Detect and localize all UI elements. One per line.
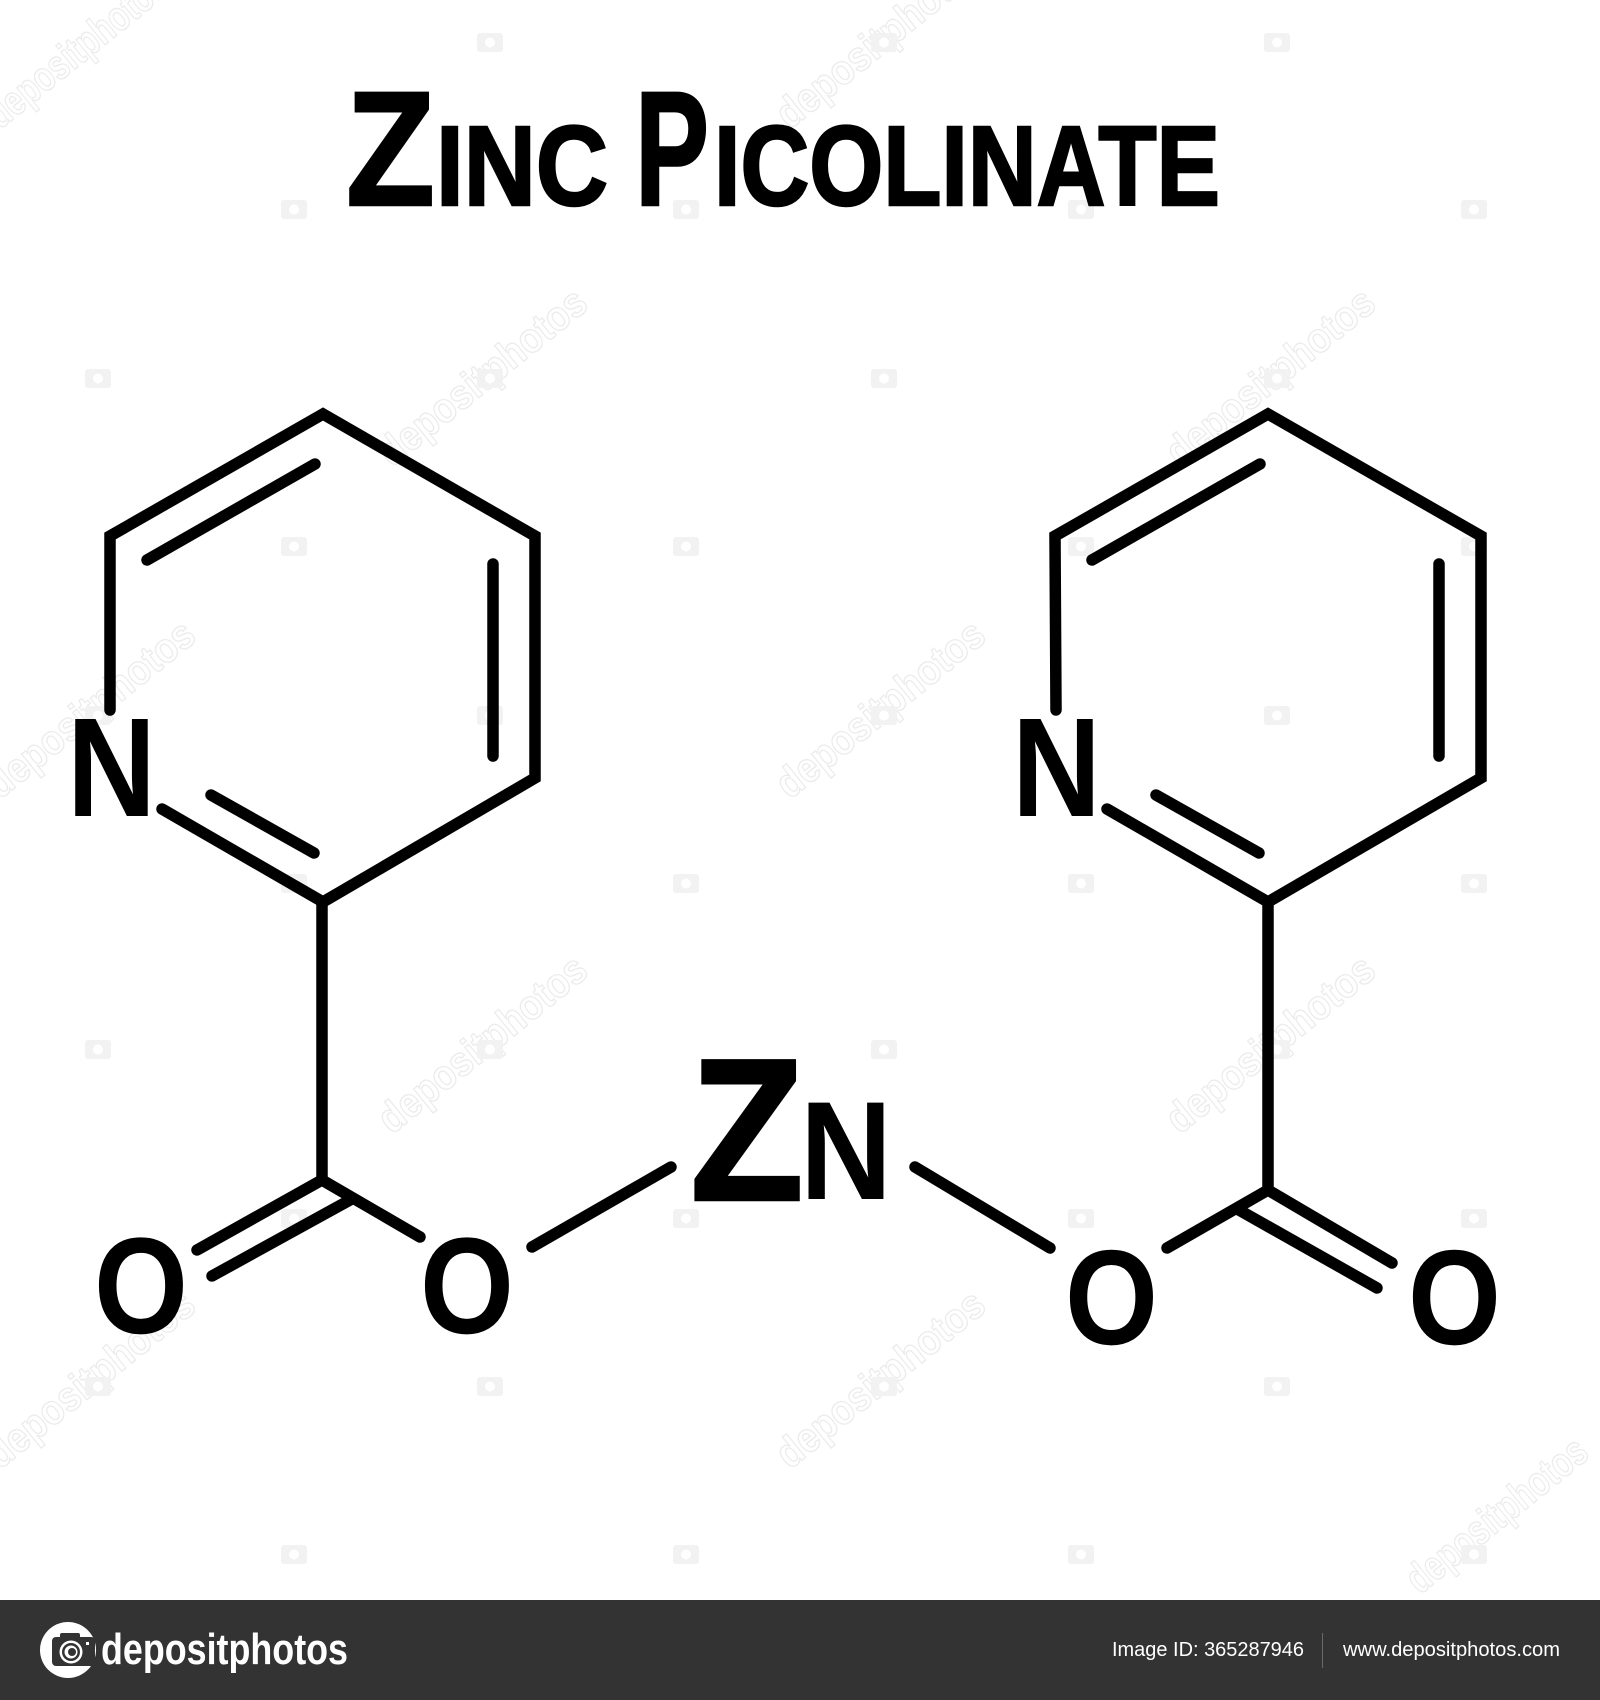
zinc atom label: N: [800, 1072, 892, 1229]
label: left bridging oxygen: O: [420, 1210, 514, 1363]
bond: zinc to right oxygen: [915, 1167, 1050, 1248]
bond: left oxygen to zinc: [532, 1167, 671, 1247]
watermark: repeated stock-photo marks: depositphotos: [1156, 945, 1384, 1142]
watermark: repeated stock-photo marks: depositphotos: [368, 278, 596, 475]
watermark: repeated stock-photo marks: depositphotos: [766, 610, 994, 807]
watermark: repeated stock-photo marks: depositphotos: [766, 1280, 994, 1477]
label: right carbonyl oxygen: O: [1408, 1222, 1501, 1373]
right pyridine ring: [1012, 414, 1481, 902]
website url: www.depositphotos.com: [1342, 1639, 1560, 1661]
zinc atom label: Z: [690, 1017, 804, 1244]
left carboxylate group: [94, 902, 514, 1363]
icon: camera logo: [40, 1622, 96, 1678]
title: Z: [346, 57, 435, 240]
footer bar: [0, 1600, 1600, 1700]
logo wordmark: depositphotos: [101, 1625, 348, 1674]
title: P: [635, 57, 709, 240]
watermark: repeated stock-photo marks: depositphotos: [368, 945, 596, 1142]
right carboxylate group: [1065, 902, 1501, 1373]
title: ICOLINATE: [714, 103, 1220, 229]
left pyridine ring: [67, 414, 535, 902]
label: left carbonyl oxygen: O: [94, 1210, 188, 1363]
label: right ring nitrogen: N: [1012, 688, 1101, 846]
image id: Image ID: 365287946: [1112, 1639, 1304, 1661]
title: [346, 57, 1220, 240]
label: left ring nitrogen: N: [67, 688, 156, 846]
watermark: repeated stock-photo marks: depositphotos: [1156, 278, 1384, 475]
label: right bridging oxygen: O: [1065, 1222, 1158, 1373]
title: INC: [436, 103, 608, 229]
zinc atom label: [690, 1017, 892, 1244]
